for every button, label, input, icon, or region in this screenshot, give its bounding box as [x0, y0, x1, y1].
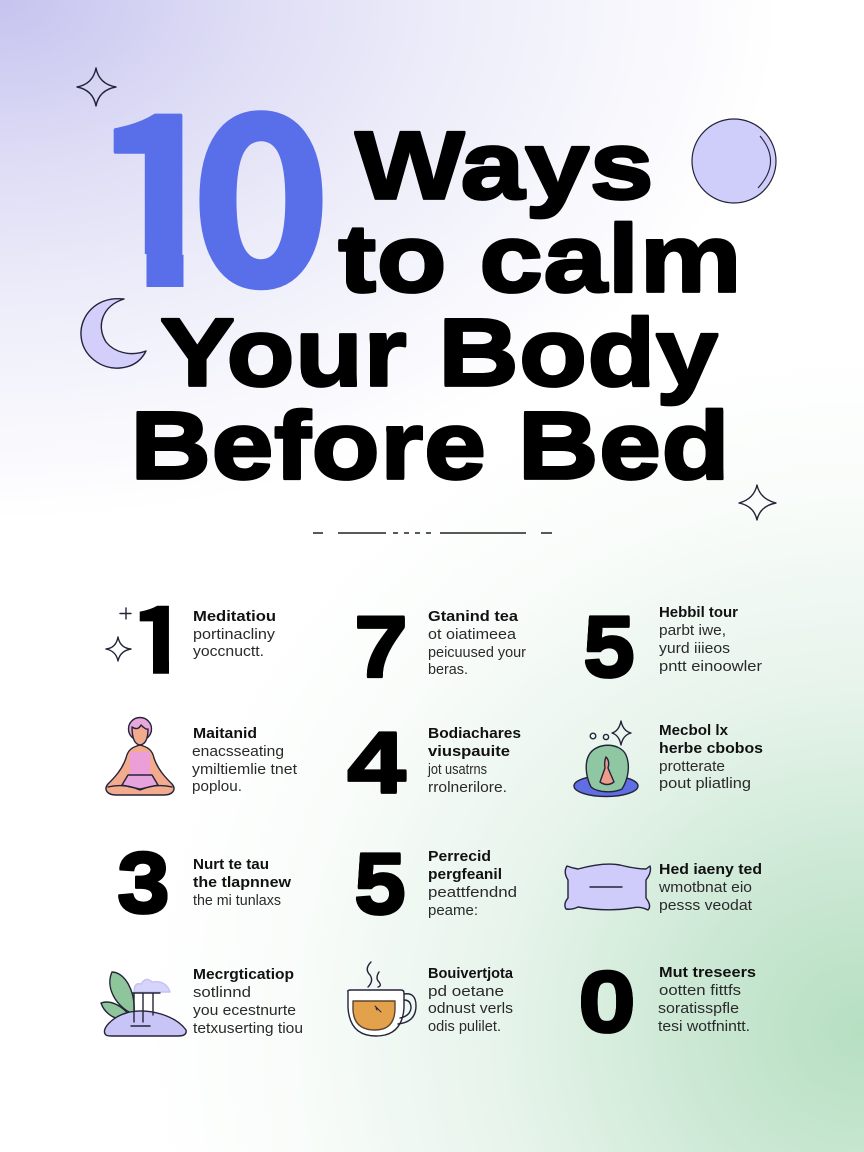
item text: viuspauite [428, 744, 510, 760]
title words [130, 113, 742, 499]
item text: Meditatiou [193, 609, 276, 625]
infographic canvas [76, 67, 777, 1037]
number 5: 5 [354, 837, 406, 932]
item text [193, 967, 303, 1037]
item text: sotlinnd [193, 985, 251, 1001]
item text: Perrecid [428, 849, 491, 865]
icon: pillow [565, 864, 650, 910]
item: Maitanid [106, 718, 297, 795]
item text [192, 726, 297, 795]
item text [193, 857, 292, 909]
number 7: 7 [354, 600, 408, 695]
item text: Hebbil tour [659, 605, 738, 621]
item text: beras. [428, 662, 468, 678]
title number 10: 0 [191, 12, 331, 353]
item: Hed iaeny ted [565, 862, 762, 914]
item text [658, 965, 756, 1035]
item text [659, 605, 762, 675]
item text: Hed iaeny ted [659, 862, 762, 878]
item text: odnust verls [428, 1001, 513, 1017]
number 5: 5 [583, 600, 635, 695]
item text: peicuused your [428, 645, 526, 661]
icon: small plus [120, 608, 131, 619]
title [114, 110, 736, 481]
item text: jot usatrns [427, 762, 487, 778]
title number 10 [114, 110, 323, 290]
item text: Mut treseers [659, 965, 756, 981]
item text: Bouivertjota [428, 966, 514, 982]
item text: tetxuserting tiou [193, 1021, 303, 1037]
title line: Before Bed: Before Bed [130, 393, 730, 499]
item text: pesss veodat [659, 898, 752, 914]
item text [428, 966, 514, 1035]
item text: enacsseating [192, 744, 284, 760]
item text: rrolnerilore. [428, 780, 507, 796]
item text: peattfendnd [428, 885, 517, 901]
item: Mecrgticatiop [101, 967, 303, 1037]
item text: peame: [428, 903, 478, 919]
item text: Gtanind tea [428, 609, 519, 625]
title line: Ways: Ways [355, 113, 654, 219]
item text: yoccnuctt. [193, 644, 264, 660]
item text: poplou. [192, 779, 242, 795]
item text: the mi tunlaxs [193, 893, 281, 909]
item text: ymiltiemlie tnet [192, 762, 297, 778]
item text: pout pliatling [659, 776, 751, 792]
item text [427, 726, 521, 796]
item text: yurd iiieos [659, 641, 730, 657]
number 1: 1 [130, 567, 188, 700]
number 4: 4 [347, 716, 406, 811]
item: Nurt te tau [117, 836, 292, 931]
item text: Bodiachares [428, 726, 521, 742]
divider [313, 532, 552, 534]
item text: ootten fittfs [659, 983, 741, 999]
number 0: 0 [578, 955, 636, 1050]
number 3: 3 [117, 836, 170, 931]
item text [428, 849, 517, 919]
icon: herbal bowl with sparkle [574, 721, 638, 796]
title line: to calm: to calm [338, 206, 742, 312]
item text: pergfeanil [428, 867, 502, 883]
item text: wmotbnat eio [658, 880, 752, 896]
item text: Maitanid [193, 726, 257, 742]
title line: Your Body: Your Body [160, 300, 718, 406]
item text [428, 609, 526, 678]
icon: sparkle [106, 637, 131, 661]
item text: parbt iwe, [659, 623, 726, 639]
item: Meditatiou [105, 606, 275, 674]
item text: ot oiatimeea [428, 627, 517, 643]
item text: protterate [659, 759, 725, 775]
item text: tesi wotfnintt. [658, 1019, 750, 1035]
item: Bouivertjota [348, 962, 514, 1036]
item text: Mecrgticatiop [193, 967, 294, 983]
item text [659, 723, 763, 792]
item text: Mecbol lx [659, 723, 728, 739]
icon: crescent moon [81, 299, 146, 368]
icon: meditating person [106, 718, 174, 795]
item: Hebbil tour [583, 600, 762, 695]
item text: Nurt te tau [193, 857, 269, 873]
item text [193, 609, 276, 660]
item text: you ecestnurte [193, 1003, 296, 1019]
item text: the tlapnnew [193, 875, 292, 891]
item text: portinacliny [193, 627, 276, 643]
item: Mut treseers [578, 955, 756, 1050]
item text: odis pulilet. [428, 1019, 501, 1035]
item: Gtanind tea [354, 600, 526, 695]
item text: soratisspfle [658, 1001, 739, 1017]
icon: sparkle beside title [739, 485, 776, 520]
item: Perrecid [354, 837, 517, 932]
icon: full moon [692, 119, 776, 203]
item: Bodiachares [347, 716, 521, 811]
item text: pd oetane [428, 984, 504, 1000]
item text [658, 862, 762, 914]
title number 10: 1 [91, 12, 227, 353]
icon: sparkle top left [77, 68, 116, 106]
icon: plant and mound [101, 972, 186, 1036]
item text: herbe cbobos [659, 741, 763, 757]
item text: pntt einoowler [659, 659, 762, 675]
icon: tea cup [348, 962, 416, 1036]
item: Mecbol lx [574, 721, 763, 796]
